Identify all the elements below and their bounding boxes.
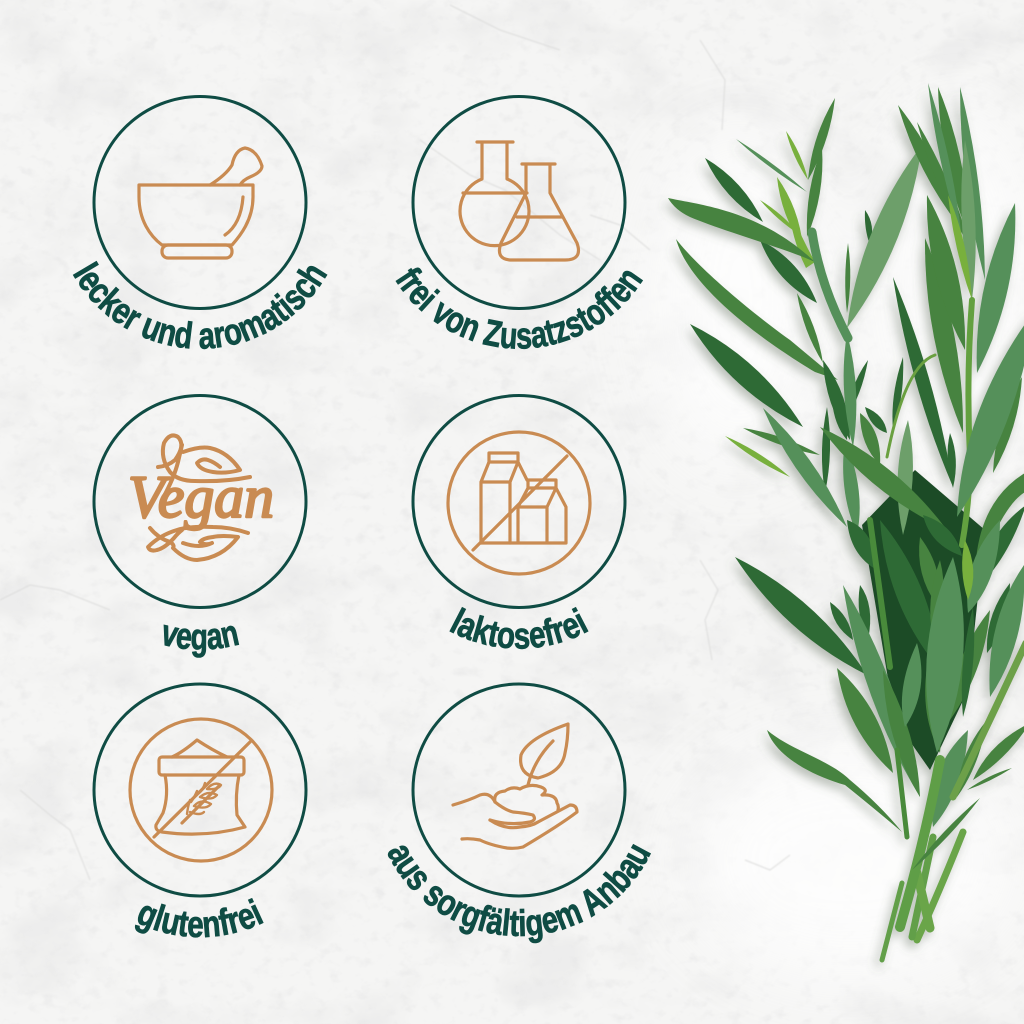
label: aus sorgfältigem Anbau: [388, 844, 651, 944]
icon: laboratory flasks: [460, 142, 578, 260]
ring: [413, 96, 625, 308]
label: glutenfrei: [134, 898, 264, 938]
lettering: Vegan: [128, 464, 274, 530]
panel: vegan: [92, 394, 308, 658]
label: frei von Zusatzstoffen: [396, 268, 644, 350]
panel: aus sorgfältigem Anbau: [388, 682, 651, 944]
ring: [413, 684, 625, 896]
ring: [94, 96, 306, 308]
ring: [94, 396, 306, 608]
illustration: tarragon bunch: [668, 83, 1024, 960]
icon: crossed-out flour sack: [130, 719, 272, 861]
label: laktosefrei: [449, 606, 588, 650]
label: vegan: [164, 624, 240, 658]
label: lecker und aromatisch: [72, 260, 328, 350]
icon: crossed-out milk cartons: [448, 432, 590, 574]
leaf swirls: [148, 435, 250, 560]
panel: laktosefrei: [412, 394, 626, 650]
icon: hand holding seedling: [453, 724, 577, 848]
panel: lecker und aromatisch: [72, 95, 328, 350]
icon: Vegan lettering with leaves: [128, 435, 274, 560]
panel: frei von Zusatzstoffen: [396, 95, 644, 350]
icon: mortar and pestle: [139, 148, 262, 258]
ring: [413, 396, 625, 608]
panel: glutenfrei: [92, 682, 308, 938]
ring: [94, 684, 306, 896]
